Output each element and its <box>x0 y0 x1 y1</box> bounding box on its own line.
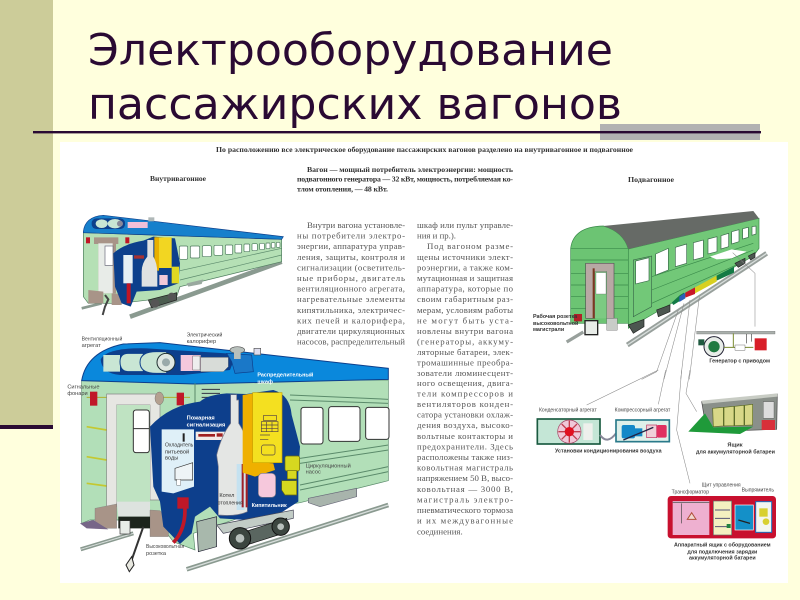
callout labels: калорифер <box>187 339 216 345</box>
illustration: large carriage cutaway: воды <box>165 456 178 462</box>
rails <box>567 253 767 345</box>
text column 2: ковольтная — 3000 В, <box>417 484 513 494</box>
label: high-voltage socket: Рабочая розетка <box>533 313 578 320</box>
illustration: large carriage cutaway: отопления <box>218 500 243 506</box>
ventilation unit and heater cutaway <box>101 347 261 375</box>
carriage end <box>571 226 628 323</box>
condenser unit <box>537 419 600 444</box>
intro text <box>297 165 513 194</box>
text column 2: тели компрессоров и <box>417 389 513 399</box>
distribution cabinet <box>243 393 282 477</box>
labels: Конденсаторный агрегат <box>539 407 597 414</box>
text column 2: роэнергии, а также ком- <box>417 262 513 272</box>
text column 1: кипятильника, электричес- <box>297 305 405 315</box>
caption: air conditioning: Установки кондиционирования воздуха <box>555 448 662 454</box>
text column 1: ких печей и калорифера, <box>297 315 405 325</box>
generator inset <box>697 331 775 357</box>
water heater <box>258 473 276 497</box>
text column 2: зователи люминесцент- <box>417 368 513 378</box>
battery box <box>688 393 777 434</box>
title rule with grey accent <box>33 124 761 140</box>
page heading: По расположению все электрическое оборудование пассажирских вагонов разделено на внутривагонное и подвагонное <box>216 145 634 154</box>
illustration: large carriage cutaway: Распределительный <box>257 372 314 379</box>
callout labels: Электрический <box>187 331 222 338</box>
equipment box <box>668 496 776 538</box>
text column 1: сигнализации (осветитель- <box>297 262 405 272</box>
compressor unit <box>616 420 669 442</box>
under-car equipment strip <box>672 249 747 305</box>
illustration: green carriage exterior <box>567 211 775 379</box>
title <box>88 25 622 130</box>
end door <box>586 263 614 318</box>
caption: battery box: Ящик <box>727 443 743 449</box>
illustration: large carriage cutaway: питьевой <box>165 448 189 455</box>
caption: equipment box: аккумуляторной батареи <box>689 555 756 562</box>
labels: Компрессорный агрегат <box>615 407 671 414</box>
text column 2: расположены также низ- <box>417 452 513 462</box>
caption: battery box <box>696 443 775 455</box>
text column 2: не могут быть уста- <box>417 315 513 325</box>
text column 2: сатора установки охлаж- <box>417 410 513 420</box>
labels: Выпрямитель <box>742 488 774 494</box>
circulation pump <box>282 456 300 495</box>
text column 2: вентиляторов конден- <box>417 399 513 409</box>
labels: Щит управления <box>702 483 741 489</box>
roof <box>82 343 388 384</box>
pointer lines <box>642 253 755 379</box>
text column 2: мутационная и защитная <box>417 273 513 283</box>
high-voltage cable <box>173 498 185 543</box>
illustration: large carriage cutaway: Охладитель <box>165 443 193 449</box>
callout labels: Вентиляционный <box>82 336 122 343</box>
label: high-voltage socket: магистрали <box>533 327 564 333</box>
pointer lines <box>587 370 697 483</box>
left sidebar band <box>0 0 53 429</box>
illustration: under-car units <box>537 370 777 562</box>
text column 2: напряжением 50 В, высо- <box>417 473 513 483</box>
windows <box>301 407 389 444</box>
title: пассажирских вагонов <box>88 79 622 130</box>
callout labels: Циркуляционный <box>306 462 351 469</box>
intro text: тлом отопления, — 48 кВт. <box>297 184 388 194</box>
bogie <box>217 510 293 549</box>
labels <box>539 407 774 496</box>
text column 2: (генераторы, аккуму- <box>417 337 513 347</box>
bogies and couplers <box>628 253 755 333</box>
step block <box>197 517 217 552</box>
text column 1: двигатели циркуляционных <box>297 326 406 336</box>
caption: equipment box: для подключения зарядки <box>687 549 758 555</box>
text column 2: предохранители. Здесь <box>417 441 513 451</box>
illustration: small carriage cutaway <box>82 215 283 317</box>
connecting hose <box>600 433 616 440</box>
labels: Трансформатор <box>672 490 709 496</box>
text column 2: ния и пр.). <box>417 231 456 241</box>
text column 2 <box>417 220 514 536</box>
text column 2: ковольтная магистраль <box>417 463 513 473</box>
fire alarm panel <box>196 432 225 440</box>
callout labels: насос <box>306 470 321 476</box>
text column 1: насосов, распределительный <box>297 337 405 347</box>
text column 2: ляторные батареи, элек- <box>417 347 513 357</box>
roof <box>603 211 759 249</box>
text column 2: пневматического тормоза <box>417 505 513 515</box>
text column 2: тромашинные преобра- <box>417 357 513 367</box>
text column 2: мерам, условиям работы <box>417 305 513 315</box>
carriage side <box>628 218 759 328</box>
caption: equipment box: Аппаратный ящик с оборудованием <box>674 542 771 549</box>
boiler <box>217 395 251 515</box>
text column 2: дения воздуха, высоко- <box>417 420 513 430</box>
illustration: large carriage cutaway: сигнализация <box>187 422 225 428</box>
text column 2: шкаф или пульт управле- <box>417 220 513 230</box>
illustration: large carriage cutaway <box>67 331 389 572</box>
title: Электрооборудование <box>88 25 613 76</box>
underframe box <box>308 488 357 507</box>
text column 2: соединения. <box>417 526 463 536</box>
text column 1: ные приборы, двигатель <box>297 273 405 283</box>
text column 1: энергии, аппаратура управ- <box>297 241 405 251</box>
callout labels: Высоковольтная <box>146 544 184 550</box>
label: high-voltage socket <box>533 313 578 333</box>
text column 1: ления, защиты, контроля и <box>297 252 405 262</box>
boiler pipes <box>237 464 248 510</box>
label: high-voltage socket: высоковольтной <box>533 320 578 327</box>
illustration: large carriage cutaway: Котел <box>219 493 234 499</box>
water cooler <box>162 429 194 493</box>
illustration: large carriage cutaway: шкаф <box>257 378 273 385</box>
text column 2: щены источники элект- <box>417 252 513 262</box>
signal lamps and side handles <box>87 392 190 486</box>
text column 1: ны потребители электро- <box>297 231 405 241</box>
carriage body <box>82 380 388 550</box>
text column 2: и их междувагонные <box>417 516 513 526</box>
illustration: large carriage cutaway: Пожарная <box>187 415 215 421</box>
text column 2: своим габаритным раз- <box>417 294 513 304</box>
callout labels: агрегат <box>82 343 101 349</box>
text column 1: нагревательные элементы <box>297 294 405 304</box>
cutaway: service compartment <box>150 390 300 544</box>
door <box>80 392 169 572</box>
generator caption: Генератор с приводом <box>709 358 770 364</box>
illustration: large carriage cutaway: Кипятильник <box>252 503 287 509</box>
intro text: Вагон — мощный потребитель электроэнергии: мощность <box>307 165 513 174</box>
text column 2: магистраль электро- <box>417 494 513 504</box>
text column 1: вентиляционного агрегата, <box>297 284 405 294</box>
text column 1: Внутри вагона установле- <box>307 220 405 230</box>
text column 1 <box>297 220 406 347</box>
text column 2: аппаратура, которые по <box>417 284 514 294</box>
text column 2: новлены внутри вагона <box>417 326 513 336</box>
rails <box>81 505 388 569</box>
panel: scanned page <box>60 142 788 583</box>
callout labels: фонари <box>67 391 88 397</box>
heading: under-car: Подвагонное <box>628 175 675 184</box>
callout labels: Сигнальные <box>67 384 100 390</box>
heading: interior: Внутривагонное <box>150 174 207 183</box>
caption: equipment box <box>674 542 771 562</box>
side door and windows <box>633 226 756 317</box>
callout labels <box>67 331 351 557</box>
text column 2: вольтные контакторы и <box>417 431 513 441</box>
text column 2: ного освещения, двига- <box>417 378 513 388</box>
caption: battery box: для аккумуляторной батареи <box>696 448 775 455</box>
text column 2: Под вагоном разме- <box>427 241 513 251</box>
intro text: подвагонного генератора — 32 кВт, мощность, потребляемая ко- <box>297 174 513 184</box>
callout labels: розетка <box>146 551 167 557</box>
